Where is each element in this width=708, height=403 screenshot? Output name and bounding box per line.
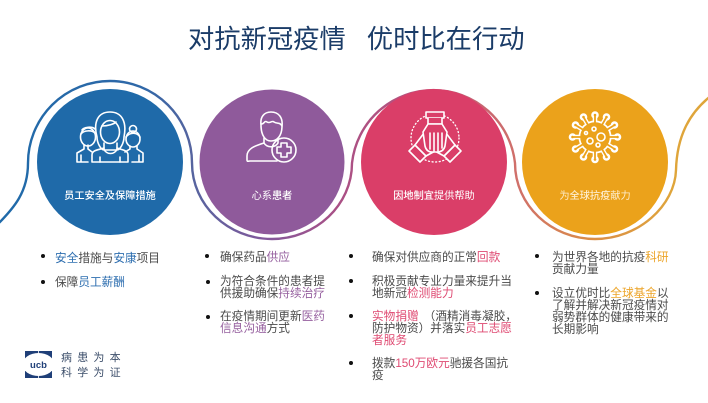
icon: patient with plus	[247, 112, 296, 162]
text block: local help bullets: 拨款150万欧元驰援各国抗	[372, 357, 508, 370]
icon: joined hands	[409, 112, 461, 162]
logo tagline: 科学为证	[61, 366, 126, 378]
circle: staff safety	[37, 89, 183, 235]
text block: global contribution bullets: 贡献力量	[552, 263, 599, 276]
icon: staff group	[77, 112, 143, 162]
text block: patients bullets: 在疫情期间更新医药	[220, 310, 325, 323]
circle: local help	[361, 89, 507, 235]
text block: local help bullets: 积极贡献专业力量来提升当	[372, 275, 512, 288]
text block: global contribution bullets: 为世界各地的抗疫科研	[552, 251, 669, 264]
text block: local help bullets: 地新冠检测能力	[372, 287, 454, 300]
text block: local help bullets: 疫	[372, 369, 384, 382]
text block: staff safety bullets: 安全措施与安康项目	[55, 252, 160, 265]
text block: global contribution bullets: 了解并解决新冠疫情对	[552, 299, 669, 312]
circle label: local help: 因地制宜提供帮助	[393, 191, 475, 202]
connecting curve	[0, 81, 708, 239]
circle: global contribution	[522, 89, 668, 235]
circle: patients	[200, 90, 344, 234]
circle label: global contribution: 为全球抗疫献力	[559, 191, 631, 202]
text block: patients bullets: 为符合条件的患者提	[220, 275, 325, 288]
text block: local help bullets: 者服务	[372, 334, 407, 347]
text block: global contribution bullets: 长期影响	[552, 323, 599, 336]
logo tagline	[61, 352, 126, 378]
logo: ucb	[25, 351, 52, 378]
text block: patients bullets: 信息沟通方式	[220, 322, 290, 335]
text block: staff safety bullets: 保障员工薪酬	[55, 276, 125, 289]
logo: ucb: ucb	[30, 360, 47, 371]
text block: local help bullets: 防护物资）并落实员工志愿	[372, 322, 512, 335]
text block: global contribution bullets: 弱势群体的健康带来的	[552, 311, 669, 324]
circle label: patients: 心系患者	[252, 191, 292, 202]
text block: patients bullets: 确保药品供应	[220, 251, 290, 264]
text block: local help bullets: 确保对供应商的正常回款	[372, 251, 500, 264]
logo tagline: 病患为本	[61, 352, 126, 364]
text block: global contribution bullets: 设立优时比全球基金以	[552, 287, 669, 300]
icon: virus	[569, 111, 621, 163]
text block: patients bullets: 供援助确保持续治疗	[220, 287, 325, 300]
circle label: staff safety: 员工安全及保障措施	[64, 191, 156, 202]
text block: local help bullets: 实物捐赠 （酒精消毒凝胶，	[372, 310, 517, 323]
title: 对抗新冠疫情 优时比在行动	[188, 24, 525, 54]
